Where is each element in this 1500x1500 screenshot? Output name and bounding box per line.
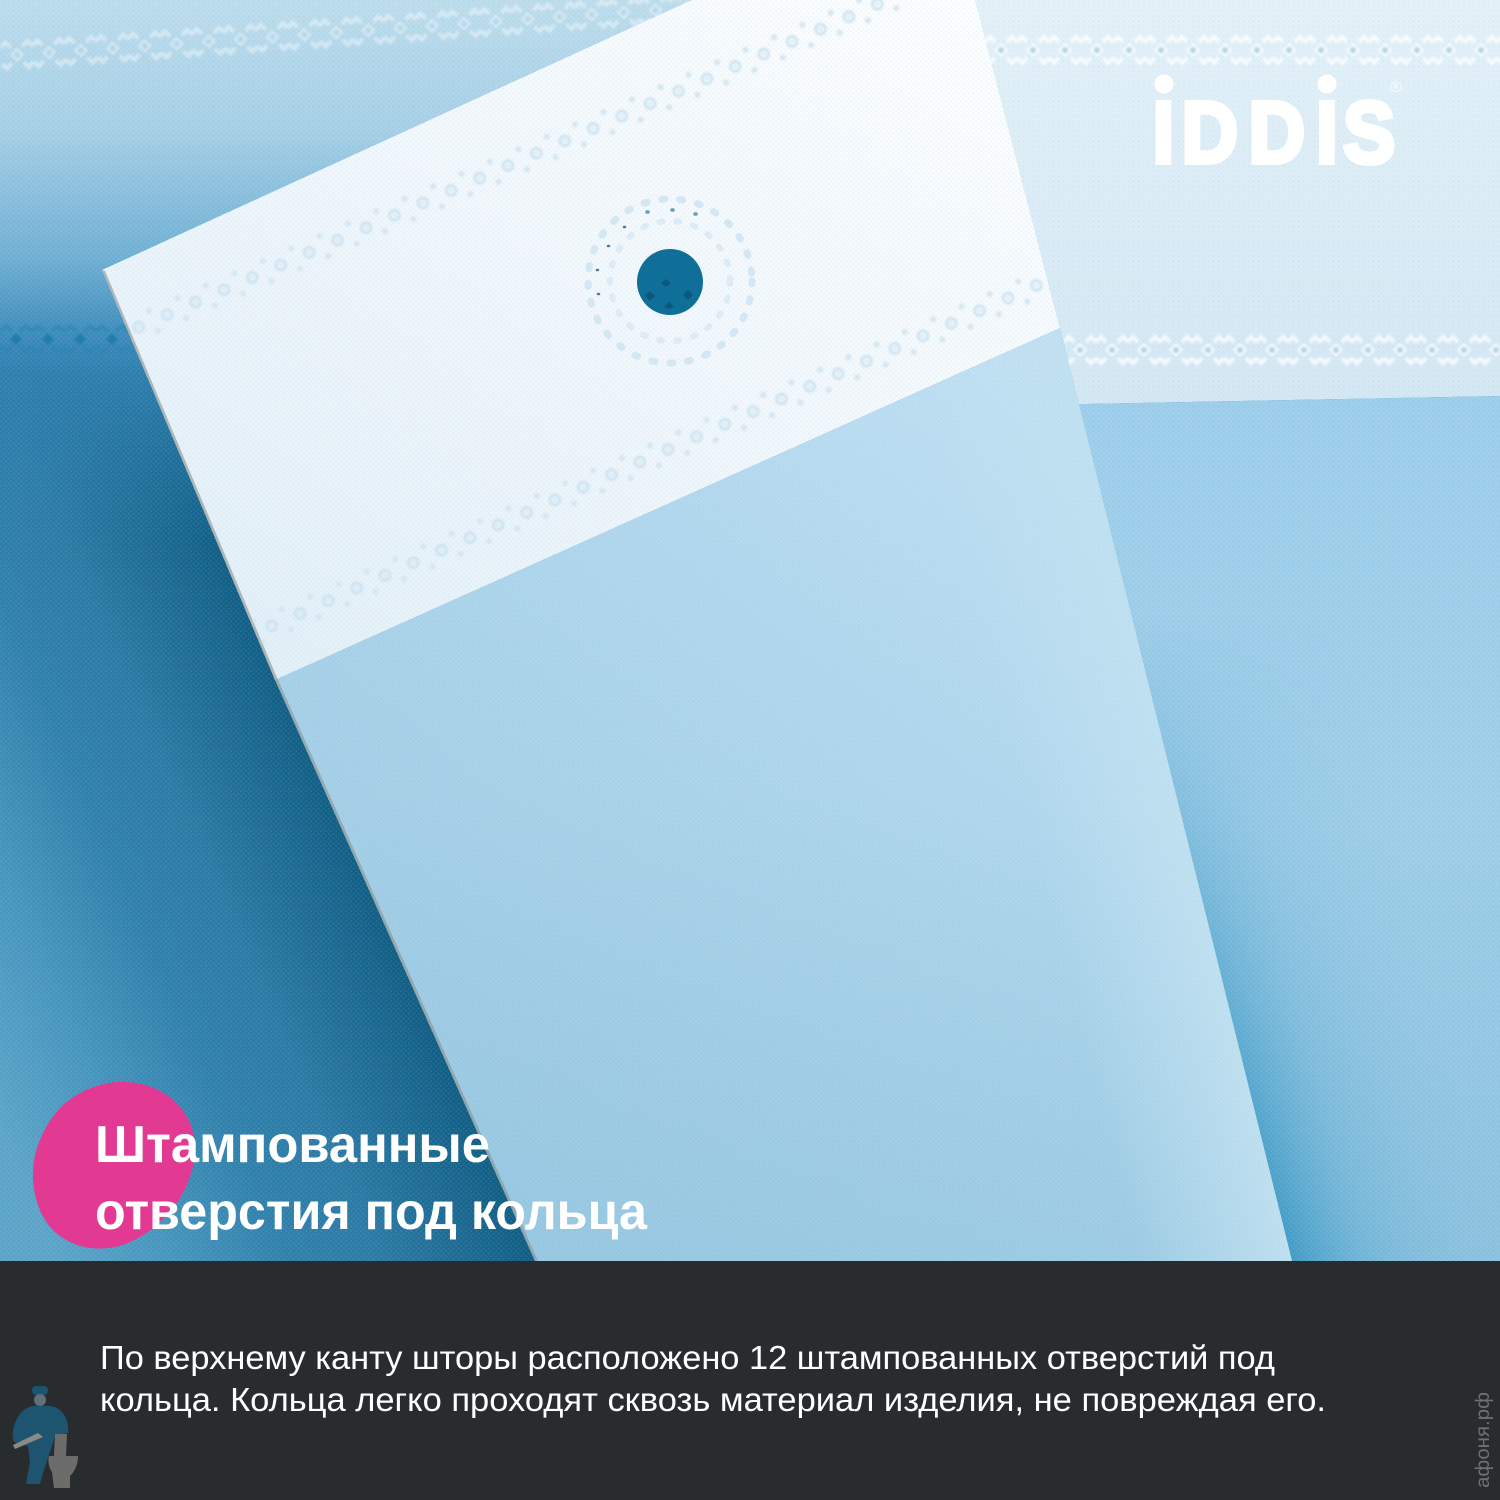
panel: dark footer [0, 1261, 1500, 1500]
panel: front curtain strip [102, 0, 1292, 1261]
toilet [48, 1434, 78, 1488]
watermark: афоня.рф [1473, 1392, 1494, 1488]
body text [100, 1340, 1326, 1419]
logo: IDDIS: ® [1390, 79, 1402, 96]
accent: pink blob [33, 1082, 195, 1249]
stitching: background upper row [0, 0, 701, 72]
plumber figure [13, 1386, 68, 1484]
icon: plumber with toilet [13, 1386, 78, 1488]
body text: кольца. Кольца легко проходят сквозь материал изделия, не повреждая его. [100, 1382, 1326, 1419]
heading: отверстия под кольца [95, 1183, 648, 1241]
icon: punched hole with ring of embossed dots [588, 199, 752, 363]
stitching: front strip rows [119, 0, 1050, 646]
heading [95, 1116, 648, 1241]
logo: IDDIS: IDDIS [1153, 84, 1395, 181]
panel: back curtain strip [960, 0, 1500, 1261]
heading: Штампованные [95, 1116, 490, 1174]
body text: По верхнему канту шторы расположено 12 штампованных отверстий под [100, 1340, 1275, 1377]
